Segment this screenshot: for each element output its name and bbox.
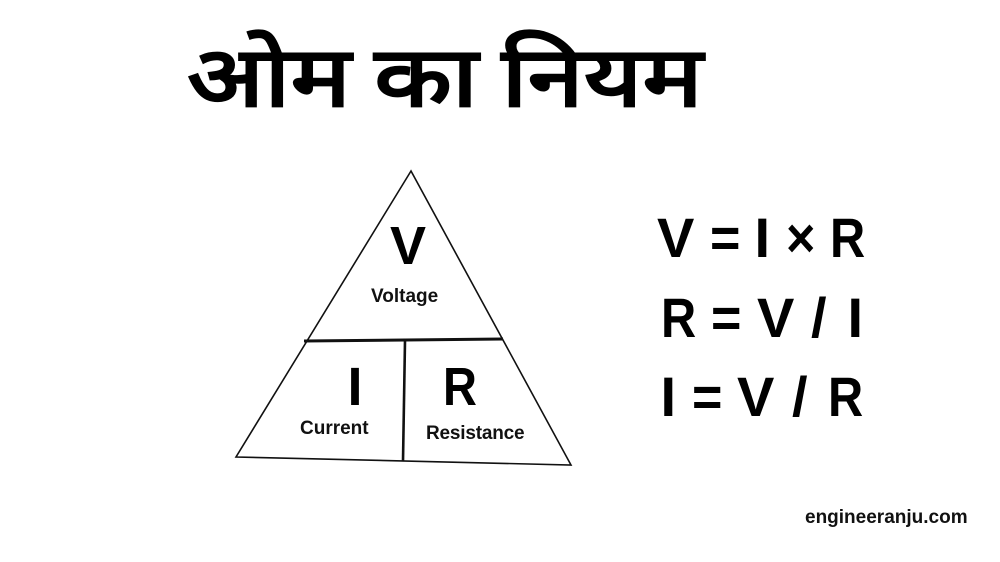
formula: R = V / I: V bbox=[757, 286, 794, 349]
formula: V = I x R: V bbox=[657, 206, 694, 269]
formula: V = I x R: × bbox=[786, 206, 815, 269]
formula: I = V / R: = bbox=[692, 365, 722, 428]
website credit: engineeranju.com bbox=[805, 507, 968, 528]
triangle label: Current: Current bbox=[300, 418, 369, 439]
triangle label: V: V bbox=[390, 216, 426, 276]
formula: V = I x R: I bbox=[754, 206, 770, 269]
formula: V = I x R: = bbox=[710, 206, 740, 269]
formula: I = V / R: V bbox=[737, 365, 774, 428]
formula: R = V / I: R bbox=[660, 286, 696, 349]
formula: R = V / I: I bbox=[848, 286, 863, 349]
formula: R = V / I: / bbox=[811, 286, 827, 349]
title: ओम का नियम bbox=[187, 30, 703, 124]
triangle label: R: R bbox=[442, 357, 476, 417]
triangle label: I: I bbox=[348, 357, 363, 417]
triangle label: Voltage: Voltage bbox=[371, 286, 438, 307]
formula: V = I x R bbox=[657, 206, 865, 269]
formula: I = V / R: R bbox=[828, 365, 863, 428]
formula: V = I x R: R bbox=[830, 206, 865, 269]
formula: I = V / R: I bbox=[660, 365, 676, 428]
formula: I = V / R: / bbox=[792, 365, 808, 428]
formula: R = V / I bbox=[660, 286, 863, 349]
formula: I = V / R bbox=[660, 365, 863, 428]
formula: R = V / I: = bbox=[711, 286, 741, 349]
triangle label: Resistance: Resistance bbox=[426, 423, 524, 444]
